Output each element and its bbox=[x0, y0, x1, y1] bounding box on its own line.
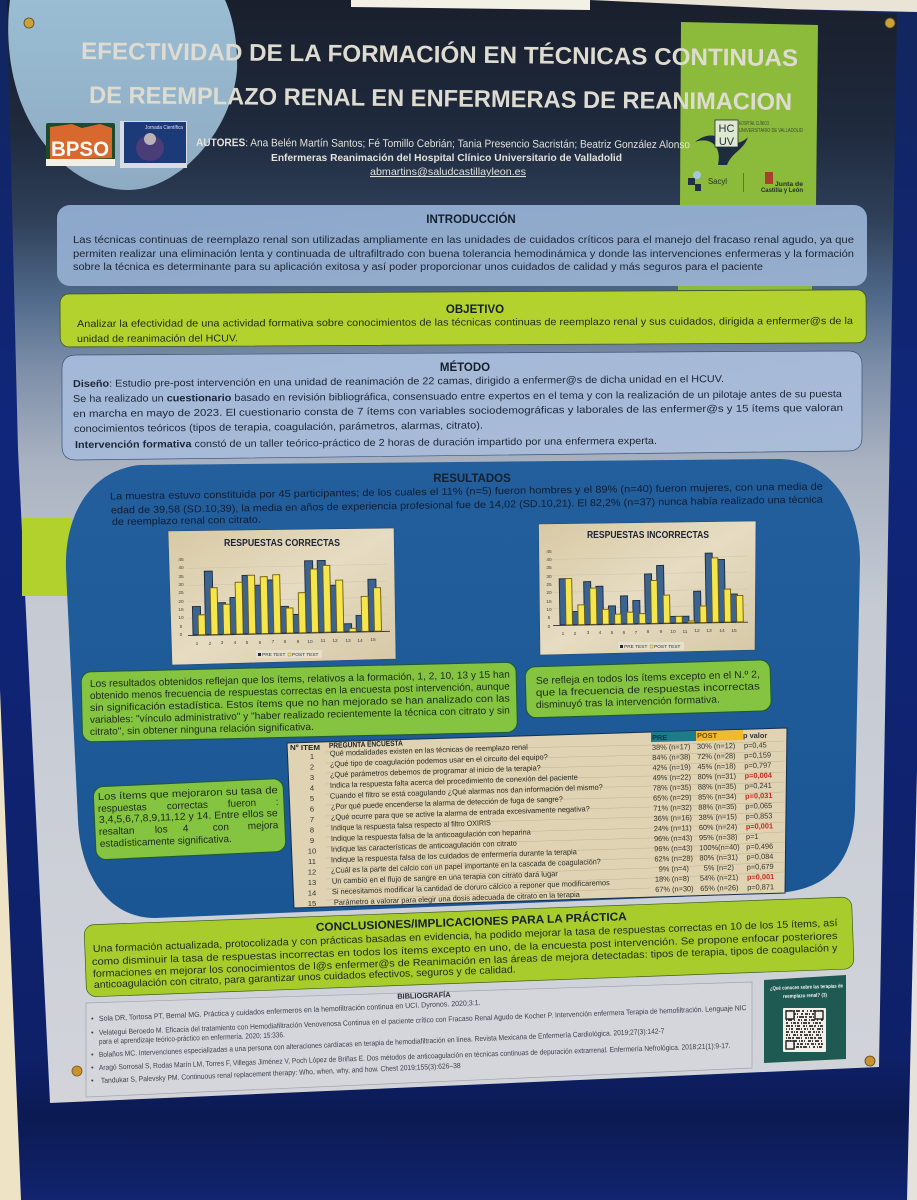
axis labels: correctas: 2 bbox=[209, 641, 212, 647]
pre, post and p values: p=0,496 bbox=[746, 842, 773, 851]
pin: bottom left bbox=[72, 1066, 82, 1076]
axis labels: incorrectas: 5 bbox=[548, 615, 551, 621]
heading: objetivo: OBJETIVO bbox=[446, 304, 504, 316]
survey questions: Cuando el filtro se está coagulando ¿Qué alarmas nos dan información del mismo? bbox=[330, 783, 603, 801]
item numbers: 9 bbox=[310, 836, 314, 845]
axis labels: incorrectas: 35 bbox=[546, 565, 552, 571]
item numbers: 1 bbox=[310, 752, 314, 761]
callout: improved items bbox=[93, 778, 286, 860]
pre, post and p values: p=0,065 bbox=[745, 801, 772, 811]
axis labels: incorrectas: 1 bbox=[562, 631, 565, 637]
bars: pre and post test bbox=[552, 552, 748, 626]
callout: improved items: resaltan bbox=[99, 826, 135, 838]
table column headings: p valor bbox=[743, 731, 767, 740]
wall strip top bbox=[590, 0, 917, 12]
icon: Sacyl logo: Sacyl bbox=[708, 176, 727, 186]
callout: improved items: 3,4,5,6,7,8,9,11,12 y 14. Entre ellos se bbox=[99, 808, 278, 826]
text: resultados summary bbox=[110, 482, 823, 528]
pre, post and p values: 38% (n=15) bbox=[698, 812, 737, 822]
axis labels: incorrectas: 10 bbox=[670, 629, 676, 635]
text: objetivo bbox=[77, 316, 853, 345]
references list: Sola DR, Tortosa PT, Bernal MG. Práctica y cuidados enfermeros en la hemofiltración continua en UCI. Dyronos. 2020;3:1. bbox=[99, 998, 481, 1023]
item numbers: 3 bbox=[310, 773, 314, 782]
icon: Junta de Castilla y León logo: Castilla y León bbox=[761, 187, 803, 194]
table column headings: POST bbox=[697, 731, 718, 740]
axis labels: incorrectas: 14 bbox=[719, 628, 725, 634]
header ellipse bbox=[8, 0, 237, 190]
pin: top left bbox=[24, 18, 34, 28]
axis labels: incorrectas: 15 bbox=[546, 599, 552, 605]
callout: correct answers analysis: obtenido menos frecuencia de respuestas correctas en la encuesta post intervención, aunque bbox=[90, 681, 510, 702]
axis labels: incorrectas: 25 bbox=[546, 582, 552, 588]
pre, post and p values: 18% (n=8) bbox=[655, 874, 689, 884]
pre, post and p values: 65% (n=26) bbox=[700, 883, 739, 893]
wall strip right bbox=[907, 770, 917, 1200]
axis labels: correctas: 13 bbox=[345, 638, 351, 644]
callout: improved items: respuestas bbox=[98, 802, 147, 815]
axis labels: correctas: 6 bbox=[259, 640, 262, 646]
axis labels: correctas: 4 bbox=[234, 640, 237, 646]
pre, post and p values: 30% (n=12) bbox=[697, 741, 735, 751]
item numbers: 14 bbox=[308, 888, 316, 898]
pin: bottom right bbox=[865, 1056, 875, 1066]
survey questions: Qué modalidades existen en las técnicas de reemplazo renal bbox=[330, 742, 528, 758]
axis labels: correctas: 10 bbox=[307, 639, 313, 645]
item numbers: 2 bbox=[310, 762, 314, 772]
callout: incorrect answers analysis bbox=[525, 660, 771, 718]
chart title: respuestas correctas: RESPUESTAS CORRECTAS bbox=[224, 537, 340, 549]
heading: método: MÉTODO bbox=[440, 361, 490, 374]
survey questions: Indique las características de anticoagulación con citrato bbox=[331, 839, 517, 854]
axis labels: incorrectas: 0 bbox=[548, 624, 551, 630]
chart title: respuestas incorrectas: RESPUESTAS INCORRECTAS bbox=[587, 529, 709, 541]
pre, post and p values: 84% (n=38) bbox=[652, 752, 691, 762]
hospital name: UNIVERSITARIO DE VALLADOLID bbox=[739, 128, 803, 134]
hospital name: HOSPITAL CLÍNICO bbox=[739, 120, 769, 127]
legend: correctas: PRE TEST bbox=[262, 652, 285, 658]
axis labels: incorrectas: 6 bbox=[623, 630, 626, 636]
axis labels: incorrectas: 2 bbox=[574, 631, 577, 637]
item numbers: 4 bbox=[310, 784, 314, 792]
text: conclusiones: formaciones en mejorar los conocimientos de l@s enfermer@s de Reanimación en las áreas de mejora detectadas: tipos de terapia, tipos de coagulación y bbox=[93, 943, 838, 980]
survey questions: ¿Qué tipo de coagulación podemos usar en el circuito del equipo? bbox=[330, 752, 548, 769]
icon: QR code bbox=[783, 1008, 826, 1052]
pre, post and p values: p=0,797 bbox=[744, 761, 771, 770]
authors: Enfermeras Reanimación del Hospital Clínico Universitario de Valladolid bbox=[271, 152, 622, 164]
text: método: en marcha en mayo de 2023. El cuestionario consta de 7 ítems con variables sociodemográficas y laborales de las enfermer@s y 15 ítems que valoran bbox=[73, 403, 843, 420]
paper taped at top bbox=[351, 0, 590, 10]
axis labels: incorrectas: 4 bbox=[599, 630, 602, 636]
survey questions: Indique la respuesta falsa de los cuidados de enfermería durante la terapia bbox=[331, 847, 578, 864]
pre, post and p values: 85% (n=34) bbox=[698, 792, 737, 802]
axis labels: correctas: 40 bbox=[178, 565, 184, 571]
pre, post and p values: p=0,001 bbox=[746, 821, 773, 831]
axis labels: incorrectas: 20 bbox=[546, 590, 552, 596]
pre, post and p values: 78% (n=35) bbox=[653, 783, 691, 793]
pre, post and p values: 24% (n=11) bbox=[654, 823, 692, 833]
callout: improved items: correctas bbox=[167, 800, 208, 812]
legend: incorrectas bbox=[618, 642, 684, 650]
axis labels: correctas: 30 bbox=[178, 582, 184, 588]
axis labels: incorrectas: 10 bbox=[546, 607, 552, 613]
chart: respuestas correctas bbox=[168, 528, 396, 665]
item numbers: 7 bbox=[310, 815, 314, 824]
icon: HCUV logo: UV bbox=[719, 136, 735, 148]
pre, post and p values: 36% (n=16) bbox=[653, 813, 692, 823]
pre, post and p values: p=0,084 bbox=[746, 852, 773, 861]
cream wall strip left bbox=[0, 690, 21, 1200]
pre, post and p values: 67% (n=30) bbox=[655, 884, 694, 894]
callout: correct answers analysis bbox=[81, 662, 517, 742]
references list: • bbox=[91, 1050, 94, 1059]
logo: jornada científica: Jornada Científica bbox=[145, 125, 183, 131]
callout: incorrect answers analysis: Se refleja en todos los ítems excepto en el N.º 2, bbox=[536, 669, 760, 687]
authors bbox=[196, 137, 690, 178]
panel: QR code bbox=[764, 975, 846, 1063]
logo: BPSO: BPSO bbox=[51, 138, 109, 161]
QR caption: reemplazo renal? (3) bbox=[783, 992, 827, 1000]
item numbers bbox=[308, 752, 316, 908]
pre, post and p values: 88% (n=35) bbox=[698, 782, 736, 792]
pre, post and p values: 54% (n=21) bbox=[700, 873, 738, 883]
pin: top right bbox=[885, 18, 895, 28]
survey questions: Un cambio en el flujo de sangre en una terapia con citrato dará lugar bbox=[332, 869, 558, 886]
heading: resultados: RESULTADOS bbox=[433, 473, 511, 485]
pre, post and p values: 49% (n=22) bbox=[653, 773, 691, 782]
pre, post and p values: 5% (n=2) bbox=[704, 863, 734, 873]
pre, post and p values: 80% (n=31) bbox=[698, 772, 736, 781]
icon: HCUV logo: HC bbox=[719, 123, 734, 135]
table column headings: PREGUNTA ENCUESTA bbox=[329, 739, 403, 750]
survey questions: ¿Por qué puede encenderse la alarma de detección de fuga de sangre? bbox=[331, 795, 563, 811]
references list bbox=[91, 998, 747, 1085]
pre, post and p values: 71% (n=32) bbox=[653, 803, 692, 813]
callout: improved items: : bbox=[276, 797, 279, 808]
callout: incorrect answers analysis: disminuyó tras la intervención formativa. bbox=[536, 695, 720, 711]
item numbers: 6 bbox=[310, 804, 314, 814]
text: resultados summary: de reemplazo renal con citrato. bbox=[112, 515, 261, 528]
item numbers: 13 bbox=[308, 878, 316, 887]
icon: Junta de Castilla y León logo bbox=[761, 172, 803, 194]
text: método bbox=[73, 374, 843, 451]
axis labels: incorrectas: 15 bbox=[731, 628, 737, 634]
callout: correct answers analysis: sin significación estadística. Estos ítems que no han mejorado se han analizado con las bbox=[90, 693, 510, 714]
table column headings: PRE bbox=[652, 733, 667, 742]
heading: bibliografía: BIBLIOGRAFÍA bbox=[397, 990, 451, 1001]
axis labels: incorrectas: 45 bbox=[546, 549, 552, 555]
text: método: Diseño : Estudio pre-post intervención en una unidad de reanimación de 22 camas, dirigido a enfermer@s de dicha unidad en el HCUV. bbox=[73, 374, 724, 390]
text: conclusiones bbox=[92, 918, 838, 991]
axis labels: correctas: 5 bbox=[246, 640, 249, 646]
text: objetivo: unidad de reanimación del HCUV. bbox=[77, 333, 238, 345]
pre, post and p values bbox=[652, 740, 775, 894]
survey questions bbox=[330, 742, 610, 907]
callout: correct answers analysis: citrato", sin obtener ninguna relación significativa. bbox=[90, 722, 314, 738]
axis labels: correctas: 10 bbox=[178, 615, 184, 621]
pre, post and p values: p=1 bbox=[746, 832, 759, 841]
text: método: Se ha realizado un cuestionario basado en revisión bibliográfica, consensuado entre expertos en el tema y con la realización de un pilotaje antes de su puesta bbox=[73, 389, 842, 405]
pre, post and p values: p=0,853 bbox=[745, 811, 773, 821]
text: método: conocimientos teóricos (tipos de terapia, coagulación, parámetros, alarmas, citrato). bbox=[74, 420, 483, 435]
pre, post and p values: 96% (n=43) bbox=[654, 833, 693, 843]
axis labels: correctas: 0 bbox=[180, 632, 183, 638]
text: resultados summary: La muestra estuvo constituida por 45 participantes; de los cuales el 11% (n=5) fueron hombres y el 89% (n=40) fueron mujeres, con una media de bbox=[110, 482, 823, 502]
legend: incorrectas: PRE TEST bbox=[624, 644, 647, 650]
authors: AUTORES: Ana Belén Martín Santos; Fé Tomillo Cebrián; Tania Presencio Sacristán; Beatriz González Alonso bbox=[196, 137, 690, 151]
QR caption bbox=[770, 983, 843, 1000]
QR caption: ¿Qué conoces sobre las terapias de bbox=[770, 983, 843, 992]
legend: incorrectas: POST TEST bbox=[654, 644, 681, 650]
table column headings: Nº ITEM bbox=[290, 743, 320, 752]
axis labels: incorrectas: 3 bbox=[587, 630, 590, 636]
chart: respuestas incorrectas bbox=[538, 521, 756, 655]
heading: introducción: INTRODUCCIÓN bbox=[426, 213, 516, 226]
callout: improved items: estadísticamente significativa. bbox=[100, 834, 232, 850]
pre, post and p values: 72% (n=28) bbox=[697, 751, 736, 761]
callout: correct answers analysis: variables: "vínculo administrativo" y "haber realizado recientemente la técnica con citrato y sin bbox=[90, 705, 510, 726]
panel: método bbox=[62, 351, 862, 460]
pre, post and p values: p=0,241 bbox=[745, 781, 772, 791]
survey questions: Parámetro a valorar para elegir una dosis adecuada de citrato en la terapia bbox=[334, 890, 581, 907]
callout: incorrect answers analysis: que la frecuencia de respuestas incorrectas bbox=[536, 681, 760, 699]
pre, post and p values: 62% (n=28) bbox=[654, 854, 693, 863]
survey questions: ¿Qué ocurre para que se active la alarma de entrada excesivamente negativa? bbox=[331, 804, 590, 822]
logo panel: hospital and institutions bbox=[678, 22, 818, 290]
panel: conclusiones bbox=[84, 897, 854, 997]
text: resultados summary: edad de 39,58 (SD.10,39), la media en años de experiencia profesional fue de 14,02 (SD.10,21). El 82,2% (n=37) nunca había realizado una técnica bbox=[111, 495, 823, 516]
survey questions: Si necesitamos modificar la cantidad de cloruro cálcico a reponer que modificaremos bbox=[332, 878, 610, 896]
pre, post and p values: p=0,001 bbox=[747, 872, 774, 882]
callout: improved items: con bbox=[213, 822, 229, 834]
axis labels: correctas bbox=[178, 557, 376, 647]
axis labels: correctas: 15 bbox=[370, 637, 376, 643]
pre, post and p values: 88% (n=35) bbox=[698, 802, 737, 812]
item numbers: 15 bbox=[308, 899, 316, 908]
axis labels: correctas: 5 bbox=[180, 624, 183, 630]
authors: abmartins@saludcastillayleon.es bbox=[370, 166, 526, 178]
pre, post and p values: 45% (n=18) bbox=[697, 761, 736, 771]
pre, post and p values: p=0,679 bbox=[747, 862, 774, 872]
axis labels: incorrectas: 7 bbox=[635, 630, 638, 636]
axis labels: incorrectas: 11 bbox=[683, 629, 688, 635]
callout: correct answers analysis: Los resultados obtenidos reflejan que los ítems, relativos a la formación, 1, 2, 10, 13 y 15 han bbox=[90, 669, 510, 690]
bars: pre and post test bbox=[186, 559, 390, 636]
table column headings bbox=[290, 731, 767, 752]
text: método: Intervención formativa constó de un taller teórico-práctico de 2 horas de duración impartido por una enfermera experta. bbox=[75, 436, 657, 451]
axis labels: incorrectas bbox=[546, 549, 737, 637]
text: objetivo: Analizar la efectividad de una actividad formativa sobre conocimientos de las técnicas continuas de reemplazo renal y sus cuidados, dirigida a enfermer@s de la bbox=[77, 316, 853, 330]
survey questions: Indique la respuesta falsa de la anticoagulación con heparina bbox=[331, 827, 532, 843]
pre, post and p values: 100%(n=40) bbox=[699, 842, 740, 852]
item numbers: 12 bbox=[308, 868, 316, 876]
references list: Bolaños MC. Intervenciones especializadas a una persona con alteraciones cardíacas en terapia de hemodiafiltración en línea. Revista Mexicana de Enfermería Cardiológica. 2019;27(3):142-7 bbox=[99, 1026, 665, 1059]
survey questions: ¿Qué parámetros debemos de programar al inicio de la terapia? bbox=[330, 763, 541, 779]
title: EFECTIVIDAD DE LA FORMACIÓN EN TÉCNICAS CONTINUAS bbox=[81, 37, 798, 72]
panel: bibliografía bbox=[86, 982, 752, 1097]
references list: para el aprendizaje teórico-práctico en enfermería. 2020; 15:336. bbox=[99, 1030, 285, 1046]
references list: • bbox=[91, 1014, 94, 1023]
title bbox=[81, 37, 798, 116]
pre, post and p values: 38% (n=17) bbox=[652, 742, 690, 752]
axis labels: correctas: 12 bbox=[332, 638, 338, 644]
axis labels: incorrectas: 30 bbox=[546, 574, 552, 580]
references list: Tandukar S, Palevsky PM. Continuous renal replacement therapy: Who, when, why, and how. Chest 2019;155(3):626–38 bbox=[101, 1061, 461, 1085]
axis labels: incorrectas: 40 bbox=[546, 557, 552, 563]
survey questions: ¿Cuál es la parte del calcio con un papel importante en la cascada de coagulación? bbox=[331, 857, 601, 875]
pre, post and p values: 65% (n=29) bbox=[653, 793, 692, 803]
references list: Velategui Beroedo M. Eficacia del tratamiento con Hemodiafiltración Venovenosa Continua en el paciente crítico con Fracaso Renal Agudo de Kocher P. Intervención enfermera Terapia de hemofiltración. Lenguaje NIC bbox=[99, 1003, 747, 1037]
axis labels: incorrectas: 5 bbox=[611, 630, 614, 636]
pre, post and p values: p=0,031 bbox=[745, 791, 772, 801]
hospital name bbox=[739, 120, 803, 134]
references list: • bbox=[91, 1076, 94, 1085]
text: introducción: Las técnicas continuas de reemplazo renal son utilizadas ampliamente en las unidades de cuidados críticos para el manejo del fracaso renal agudo, ya que bbox=[73, 235, 854, 246]
text: introducción: permiten realizar una eliminación lenta y continuada de ultrafiltrado con buena tolerancia hemodinámica y donde las intervenciones enfermeras y la formación bbox=[73, 249, 854, 260]
axis labels: incorrectas: 13 bbox=[706, 628, 712, 634]
pre, post and p values: p=0,45 bbox=[744, 740, 767, 750]
survey questions: Indica la respuesta falta acerca del procedimiento de conexión del paciente bbox=[330, 773, 578, 790]
pre, post and p values: p=0,004 bbox=[745, 771, 773, 780]
callout: improved items: mejora bbox=[248, 820, 279, 832]
pre, post and p values: 9% (n=4) bbox=[659, 864, 689, 874]
icon: Sacyl logo bbox=[688, 171, 727, 191]
title: DE REEMPLAZO RENAL EN ENFERMERAS DE REANIMACION bbox=[89, 82, 792, 116]
axis labels: correctas: 3 bbox=[221, 640, 224, 646]
axis labels: correctas: 45 bbox=[178, 557, 184, 563]
axis labels: correctas: 7 bbox=[272, 639, 275, 645]
axis labels: correctas: 20 bbox=[178, 599, 184, 605]
item numbers: 8 bbox=[310, 826, 314, 834]
text: introducción bbox=[73, 235, 854, 273]
callout: improved items: fueron bbox=[228, 798, 256, 810]
callout: improved items: Los ítems que mejoraron su tasa de bbox=[98, 785, 278, 803]
panel: resultados bbox=[66, 459, 860, 918]
pre, post and p values: 60% (n=24) bbox=[699, 822, 737, 832]
legend: correctas: POST TEST bbox=[292, 652, 319, 658]
pre, post and p values: p=0,159 bbox=[744, 750, 771, 760]
axis labels: correctas: 35 bbox=[178, 574, 184, 580]
icon: HCUV logo bbox=[695, 120, 748, 165]
text: conclusiones: como disminuir la tasa de respuestas incorrectas en todos los ítems excepto en uno, de la encuesta post intervención. Se propone enfocar posteriores bbox=[92, 931, 838, 968]
item numbers: 11 bbox=[308, 857, 316, 866]
heading: conclusiones: CONCLUSIONES/IMPLICACIONES PARA LA PRÁCTICA bbox=[316, 910, 627, 934]
references list: • bbox=[91, 1063, 94, 1072]
axis labels: incorrectas: 12 bbox=[694, 628, 700, 634]
logo: jornada científica bbox=[120, 121, 187, 168]
references list: Aragó Sorrosal S, Rodas Marín LM, Torres F, Villegas Jiménez V, Poch López de Briñas E. Dos métodos de anticoagulación en técnicas continuas de depuración extrarrenal. Enfermería Nefrológica. 2018;21(1):9-17. bbox=[99, 1041, 731, 1072]
survey questions: Indique la respuesta falsa respecto al filtro OXIRIS bbox=[331, 818, 491, 832]
axis labels: correctas: 1 bbox=[196, 641, 199, 647]
pre, post and p values: 95% (n=38) bbox=[699, 832, 738, 842]
item numbers: 10 bbox=[308, 846, 316, 856]
axis labels: correctas: 15 bbox=[178, 607, 184, 613]
axis labels: incorrectas: 9 bbox=[660, 629, 663, 635]
callout: improved items: 4 bbox=[183, 824, 189, 835]
legend: correctas bbox=[256, 650, 322, 658]
pre, post and p values: 42% (n=19) bbox=[652, 762, 691, 772]
item numbers: 5 bbox=[310, 794, 314, 803]
logo: BPSO bbox=[46, 123, 115, 166]
pre, post and p values: p=0,871 bbox=[747, 882, 774, 892]
axis labels: correctas: 11 bbox=[321, 638, 326, 644]
text: introducción: sobre la técnica es determinante para su aplicación exitosa y así poder proporcionar unos cuidados de calidad y más seguros para el paciente bbox=[73, 262, 763, 273]
panel: introducción bbox=[57, 205, 867, 286]
table: survey questions and results bbox=[287, 728, 787, 908]
axis labels: correctas: 14 bbox=[357, 638, 363, 644]
axis labels: correctas: 9 bbox=[297, 639, 300, 645]
axis labels: incorrectas: 8 bbox=[647, 629, 650, 635]
pre, post and p values: 80% (n=31) bbox=[699, 853, 738, 862]
accent: green strip bbox=[22, 518, 72, 596]
icon: Junta de Castilla y León logo: Junta de bbox=[775, 181, 803, 188]
references list: • bbox=[91, 1028, 94, 1037]
table header cells bbox=[651, 730, 743, 742]
axis labels: correctas: 25 bbox=[178, 590, 184, 596]
text: conclusiones: anticoagulación con citrato, para garantizar unos cuidados efectivos, seguros y de calidad. bbox=[94, 965, 516, 991]
callout: improved items: los bbox=[155, 824, 168, 836]
panel: objetivo bbox=[60, 290, 866, 347]
pre, post and p values: 96% (n=43) bbox=[654, 844, 693, 853]
axis labels: correctas: 8 bbox=[284, 639, 287, 645]
text: conclusiones: Una formación actualizada, protocolizada y con prácticas basadas en evidencia, ha podido mejorar la tasa de respuestas correctas en 10 de los 15 ítems, así bbox=[93, 918, 838, 955]
table row rules bbox=[326, 741, 785, 900]
